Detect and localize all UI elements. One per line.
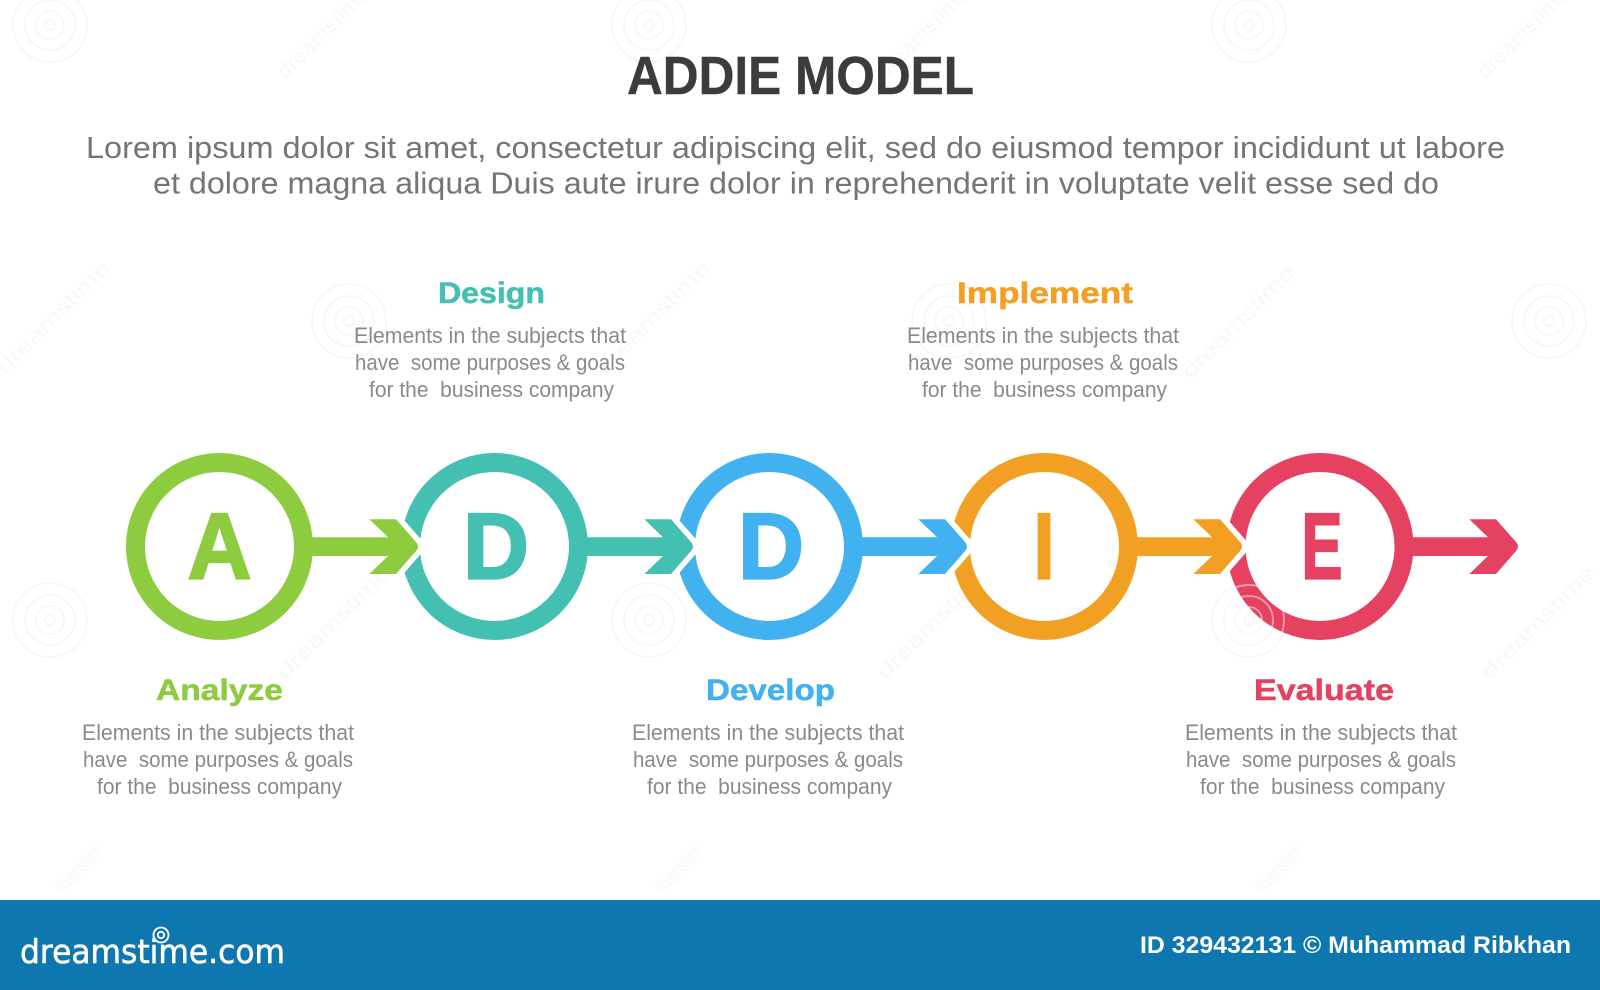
description: Evaluate: have some purposes & goals [1186, 747, 1456, 772]
ring: D (Develop): D [738, 494, 804, 598]
heading: Develop: Develop [706, 674, 835, 707]
step: Implement [907, 277, 1179, 402]
ring: I [960, 462, 1128, 630]
description: Implement [907, 323, 1179, 402]
step: Evaluate [1185, 674, 1457, 799]
arrow: I to E [1134, 519, 1242, 574]
ring: E [1236, 462, 1404, 630]
ring: D (Design): D [463, 494, 529, 598]
subtitle: et dolore magna aliqua Duis aute irure dolor in reprehenderit in voluptate velit esse sed do [153, 166, 1439, 200]
heading: Evaluate: Evaluate [1254, 674, 1394, 707]
watermark text: dreamstime [1178, 262, 1300, 384]
footer logo text: dreamstime.com [20, 932, 285, 971]
watermark text: dreamstime [873, 562, 995, 684]
heading: Analyze: Analyze [156, 674, 283, 707]
step: Develop [632, 674, 904, 799]
description: Analyze: for the business company [97, 774, 342, 799]
description: Analyze [82, 720, 354, 799]
image credit: ID 329432131 © Muhammad Ribkhan [1140, 932, 1571, 959]
arrow: D to I [859, 519, 967, 574]
description: Implement: for the business company [922, 377, 1167, 402]
watermark text: dreamstime [1250, 841, 1308, 899]
ring: I: I [1034, 494, 1054, 598]
watermark text: dreamstime [593, 257, 715, 379]
arrow: A to D [310, 519, 418, 574]
description: Implement: Elements in the subjects that [907, 323, 1179, 348]
description: Implement: have some purposes & goals [908, 350, 1178, 375]
description: Analyze: have some purposes & goals [83, 747, 353, 772]
arrow: D to D [585, 519, 693, 574]
description: Develop: have some purposes & goals [633, 747, 903, 772]
description: Design: for the business company [369, 377, 614, 402]
title: ADDIE MODEL [627, 46, 974, 106]
ring: D (Develop) [686, 462, 854, 630]
subtitle [86, 130, 1505, 200]
ring: A [136, 462, 304, 630]
watermark pattern [13, 0, 1586, 657]
ring: E: E [1302, 494, 1342, 598]
description: Evaluate: Elements in the subjects that [1185, 720, 1457, 745]
ring: A: A [188, 494, 252, 598]
icon: spiral logo [154, 928, 168, 942]
description: Develop: Elements in the subjects that [632, 720, 904, 745]
watermark text: dreamstime [50, 841, 108, 899]
step: Design [354, 277, 626, 402]
description: Develop: for the business company [647, 774, 892, 799]
description: Evaluate [1185, 720, 1457, 799]
description: Design [354, 323, 626, 402]
subtitle: Lorem ipsum dolor sit amet, consectetur adipiscing elit, sed do eiusmod tempor incididunt ut labore [86, 130, 1505, 165]
footer bar [0, 900, 1600, 990]
step: Analyze [82, 674, 354, 799]
watermark overlay on E ring [1214, 585, 1284, 655]
ring: D (Design) [410, 462, 578, 630]
description: Analyze: Elements in the subjects that [82, 720, 354, 745]
watermark text: dreamstime [1478, 562, 1600, 684]
description: Design: Elements in the subjects that [354, 323, 626, 348]
description: Design: have some purposes & goals [355, 350, 625, 375]
heading: Implement: Implement [957, 277, 1133, 310]
description: Develop [632, 720, 904, 799]
description: Evaluate: for the business company [1200, 774, 1445, 799]
heading: Design: Design [438, 277, 545, 310]
watermark text: dreamstime [650, 841, 708, 899]
watermark text: dreamstime [273, 562, 395, 684]
arrow: E outgoing [1410, 519, 1518, 574]
